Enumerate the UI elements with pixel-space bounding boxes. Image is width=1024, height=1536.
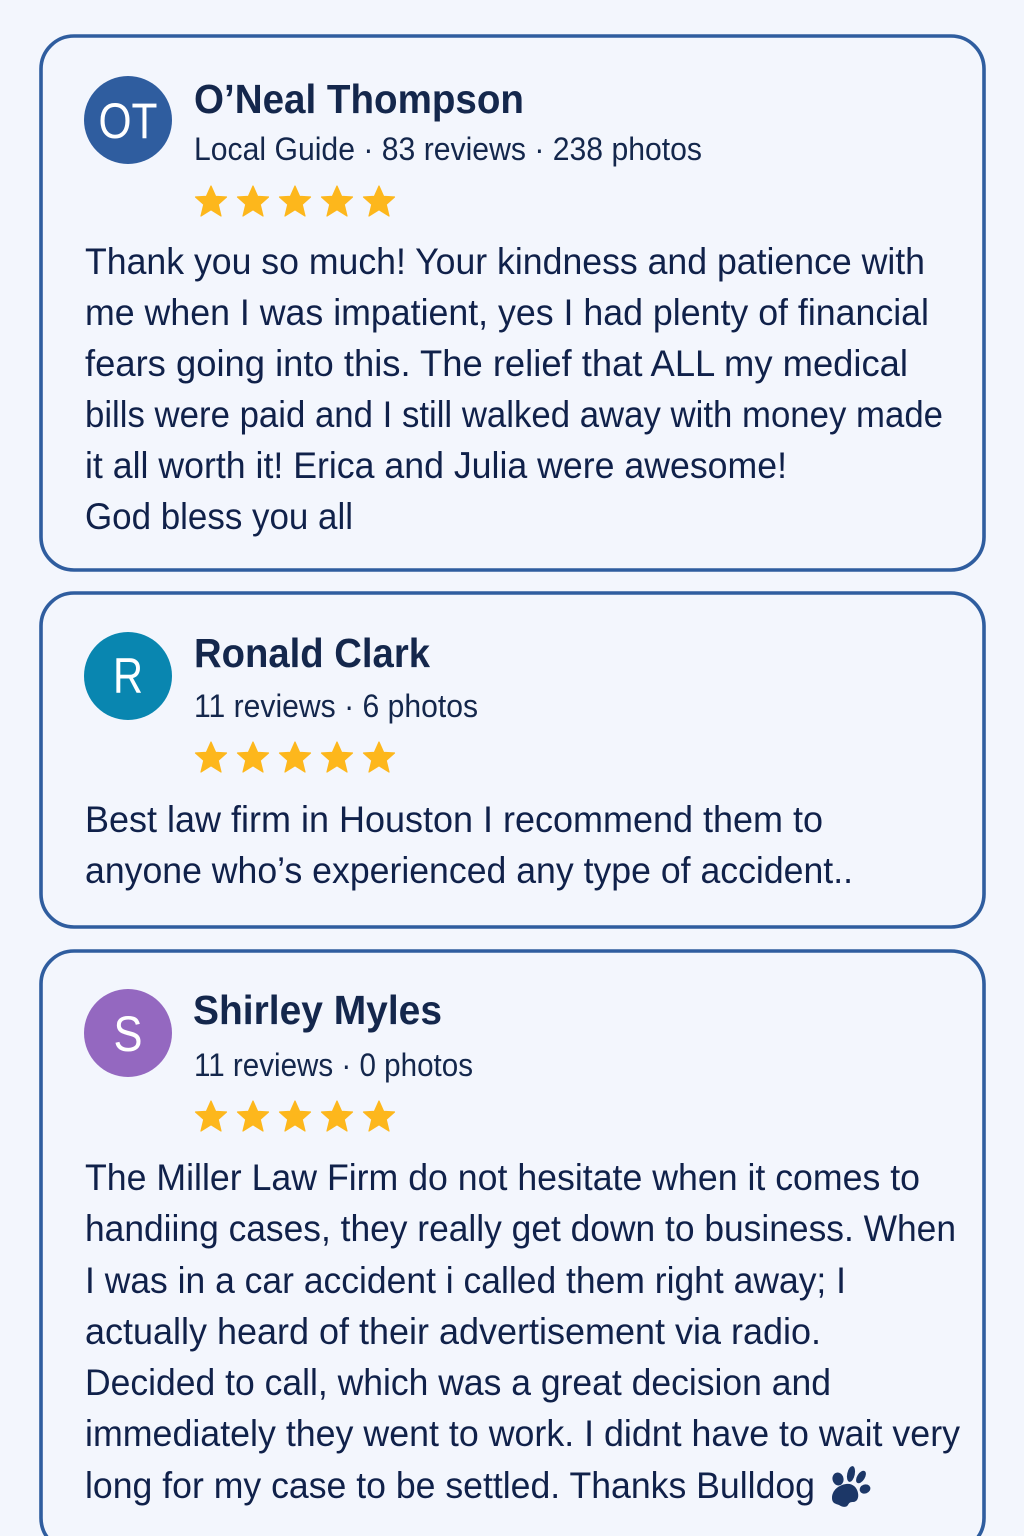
review text bbox=[85, 1157, 960, 1506]
reviewer stats: 11 reviews · 6 photos bbox=[194, 688, 478, 724]
review text: anyone who’s experienced any type of accident.. bbox=[85, 850, 853, 891]
review text: Decided to call, which was a great decision and bbox=[85, 1362, 831, 1403]
avatar R: R bbox=[113, 648, 143, 704]
review text: bills were paid and I still walked away with money made bbox=[85, 394, 943, 435]
panel: review Ronald Clark bbox=[41, 593, 984, 927]
reviewer stats: 11 reviews · 0 photos bbox=[194, 1047, 473, 1083]
review text bbox=[85, 799, 853, 891]
reviewer name: Ronald Clark bbox=[194, 630, 430, 676]
card outline bbox=[41, 951, 984, 1536]
star rating bbox=[196, 186, 394, 216]
avatar S: S bbox=[114, 1006, 142, 1062]
avatar OT: OT bbox=[98, 93, 158, 149]
review text: Best law firm in Houston I recommend them to bbox=[85, 799, 823, 840]
card outline bbox=[41, 593, 984, 927]
card outline bbox=[41, 36, 984, 570]
panel: review O'Neal Thompson bbox=[41, 36, 984, 570]
avatar S bbox=[84, 989, 172, 1077]
reviewer name: Shirley Myles bbox=[193, 987, 442, 1033]
review text bbox=[85, 241, 943, 537]
review text: God bless you all bbox=[85, 496, 353, 537]
review text: Thank you so much! Your kindness and patience with bbox=[85, 241, 925, 282]
star rating bbox=[196, 742, 394, 772]
avatar OT bbox=[84, 76, 172, 164]
review text: immediately they went to work. I didnt have to wait very bbox=[85, 1413, 960, 1454]
review text: actually heard of their advertisement via radio. bbox=[85, 1311, 821, 1352]
review text: me when I was impatient, yes I had plenty of financial bbox=[85, 292, 929, 333]
review text: long for my case to be settled. Thanks Bulldog bbox=[85, 1465, 815, 1506]
review text: I was in a car accident i called them right away; I bbox=[85, 1260, 846, 1301]
review text: fears going into this. The relief that ALL my medical bbox=[85, 343, 908, 384]
reviewer stats: Local Guide · 83 reviews · 238 photos bbox=[194, 131, 702, 167]
avatar R bbox=[84, 632, 172, 720]
review text: The Miller Law Firm do not hesitate when it comes to bbox=[85, 1157, 920, 1198]
panel: review Shirley Myles bbox=[41, 951, 984, 1536]
reviewer name: O’Neal Thompson bbox=[194, 76, 524, 122]
review text: handiing cases, they really get down to business. When bbox=[85, 1208, 956, 1249]
review text: it all worth it! Erica and Julia were awesome! bbox=[85, 445, 787, 486]
icon: paw print bbox=[831, 1465, 872, 1507]
star rating bbox=[196, 1101, 394, 1131]
